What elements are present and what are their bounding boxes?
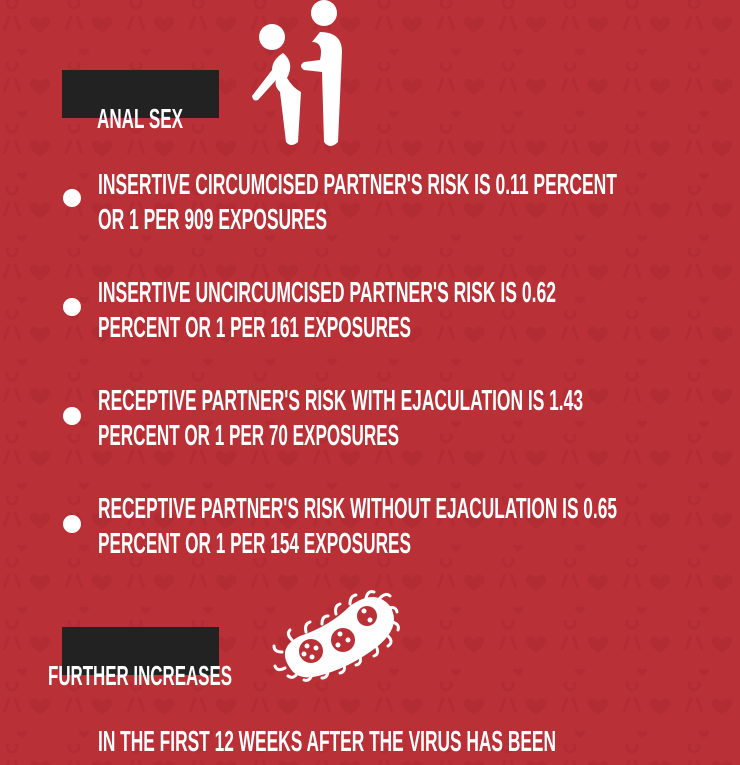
bullet 1 [63, 169, 617, 236]
bullet 3: PERCENT OR 1 PER 70 EXPOSURES [98, 420, 399, 452]
heading: further increases [48, 627, 232, 691]
bullet 1: OR 1 PER 909 EXPOSURES [98, 204, 327, 236]
bullet 4: PERCENT OR 1 PER 154 EXPOSURES [98, 528, 411, 560]
icon: two figures [252, 0, 342, 146]
bullet 2 [63, 277, 556, 344]
bullet 2: PERCENT OR 1 PER 161 EXPOSURES [98, 312, 411, 344]
heading: anal sex: ANAL SEX [97, 103, 183, 134]
icon: virus/bacterium [274, 592, 398, 680]
bullet 3 [63, 385, 583, 452]
heading: further increases: FURTHER INCREASES [48, 660, 232, 691]
bullet 4 [63, 493, 617, 560]
heading: anal sex [62, 70, 219, 134]
bullet list: anal sex risks [63, 169, 617, 560]
